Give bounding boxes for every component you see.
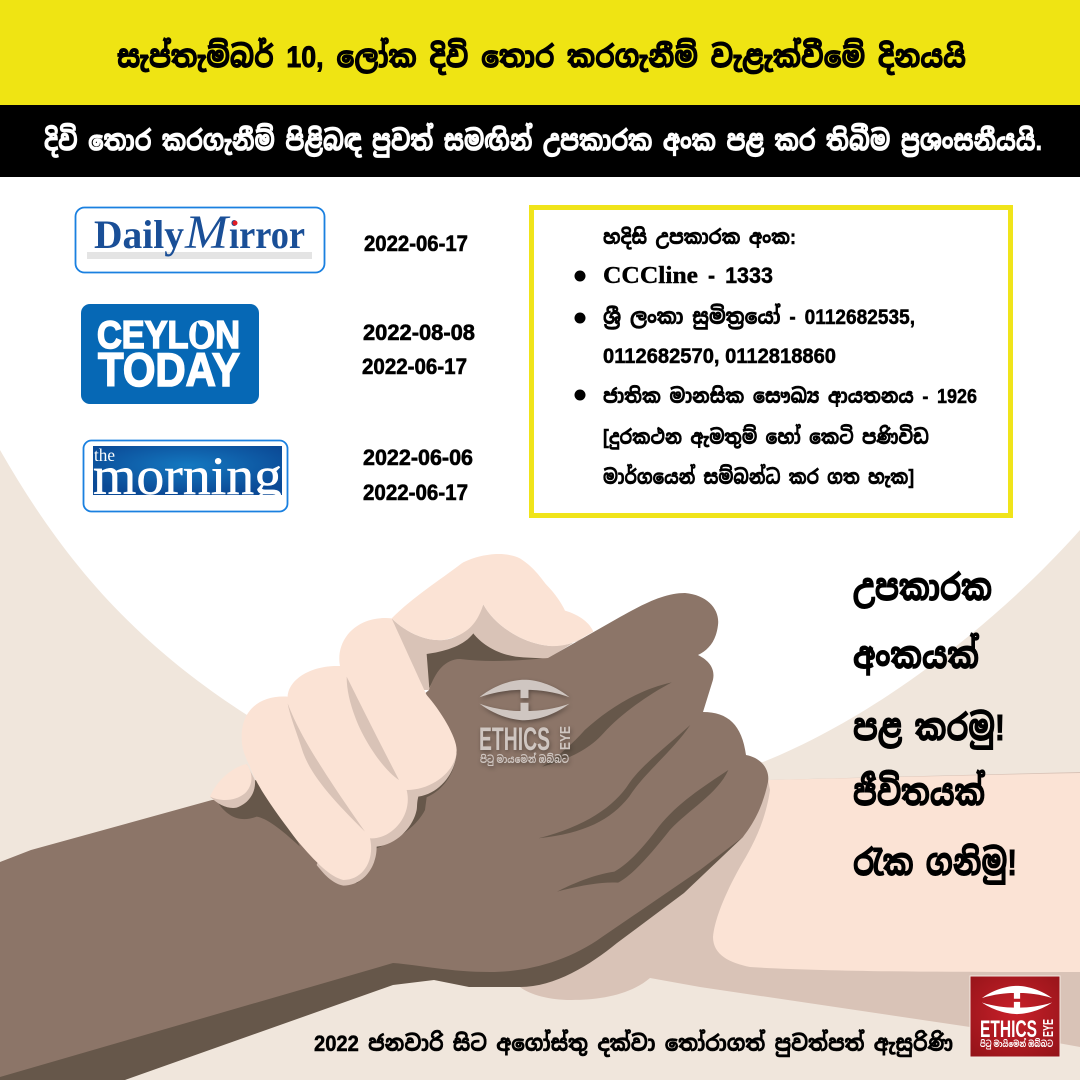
logo: Ceylon Today: CEYLON xyxy=(97,314,240,357)
slogan: ජීවිතයක් xyxy=(853,769,985,813)
dates: Ceylon Today: 2022-06-17 xyxy=(362,354,467,379)
background beige shape xyxy=(0,450,1080,1080)
thumb flesh xyxy=(392,554,593,646)
bullet list: - 1333 xyxy=(708,263,773,288)
thumb shadow xyxy=(392,604,583,690)
panel heading: හදිසි උපකාරක අංක: xyxy=(603,226,796,249)
thumb web shadow xyxy=(427,633,548,688)
watermark tagline: පිටු මායමෙන් ඔබ්බට xyxy=(480,752,569,766)
footer source note: 2022 ජනවාරි සිට අගෝස්තු දක්වා තෝරාගත් පුවත්පත් ඇසුරිණි xyxy=(314,1029,953,1057)
slogan: පළ කරමු! xyxy=(853,707,1005,750)
watermark name: ETHICS xyxy=(479,721,550,757)
badge name: ETHICS xyxy=(980,1016,1037,1043)
light arm xyxy=(713,773,1080,972)
light arm shadow xyxy=(520,772,1080,1047)
badge eye word: EYE xyxy=(1040,1019,1057,1037)
dates: Ceylon Today xyxy=(362,320,475,379)
finger crease 1 xyxy=(288,703,365,832)
logo: Daily Mirror: M xyxy=(184,206,231,259)
badge eye xyxy=(982,986,1052,1014)
logo: Ceylon Today xyxy=(81,304,259,404)
slogan: රැක ගනිමු! xyxy=(853,842,1017,885)
slogan: උපකාරක xyxy=(853,567,992,609)
thumb from above xyxy=(392,554,593,690)
badge tagline: පිටු මායිමෙන් ඔබ්බට xyxy=(980,1038,1053,1049)
finger dark shadow right xyxy=(343,753,457,883)
dates: Ceylon Today: 2022-08-08 xyxy=(363,320,475,345)
date: Daily Mirror: 2022-06-17 xyxy=(364,231,468,256)
slogan: අංකයක් xyxy=(853,632,979,676)
dark arm shadow xyxy=(0,837,743,1080)
logo: Ceylon Today: TODAY xyxy=(98,343,240,396)
knuckle creases xyxy=(539,682,728,892)
slogan xyxy=(853,567,1017,885)
dates: The Morning: 2022-06-06 xyxy=(363,445,473,470)
watermark eye xyxy=(480,680,570,720)
panel: emergency numbers xyxy=(532,208,1010,516)
bullet list xyxy=(574,263,977,489)
logo: The Morning: morning xyxy=(93,446,282,506)
bullet list: CCCline xyxy=(603,263,698,289)
subtitle band xyxy=(0,105,1080,177)
finger crease 2 xyxy=(347,677,399,780)
finger dark shadow left xyxy=(218,773,300,847)
logo: Daily Mirror xyxy=(76,206,324,272)
dates: The Morning: 2022-06-17 xyxy=(363,480,468,505)
illustration: clasped hands xyxy=(0,554,1080,1080)
bullet list: ශ්‍රී ලංකා සුමිත්‍රයෝ - 0112682535, xyxy=(603,303,915,330)
bullet list: ජාතික මානසික සෞඛ්‍ය ආයතනය - 1926 xyxy=(603,385,977,408)
logo: The Morning: the xyxy=(94,445,115,465)
dates: The Morning xyxy=(363,445,473,505)
bullet list: [දුරකථන ඇමතුම් හෝ කෙටි පණිවිඩ xyxy=(603,424,929,449)
title: සැප්තැම්බර් 10, ලෝක දිවි තොර කරගැනීම් වැළැක්වීමේ දිනයයි xyxy=(117,37,966,75)
watermark eye word: EYE xyxy=(557,726,574,750)
dark arm and hand xyxy=(0,593,768,1077)
logo: Daily Mirror: Daily xyxy=(94,212,184,257)
thumb tip xyxy=(210,764,251,800)
watermark: ethics eye logo xyxy=(479,680,574,766)
bullet list: මාර්ගයෙන් සම්බන්ධ කර ගත හැක] xyxy=(603,464,914,489)
thumb tip shadow xyxy=(210,764,255,808)
four fingers group xyxy=(210,618,457,886)
finger light shadow xyxy=(317,740,457,886)
island mark in the letter O xyxy=(196,322,206,345)
logo: Daily Mirror: irror xyxy=(229,212,305,257)
finger flesh xyxy=(242,618,457,880)
logo: ethics eye badge xyxy=(970,976,1060,1057)
bullet list: 0112682570, 0112818860 xyxy=(603,345,836,368)
top title band xyxy=(0,0,1080,105)
